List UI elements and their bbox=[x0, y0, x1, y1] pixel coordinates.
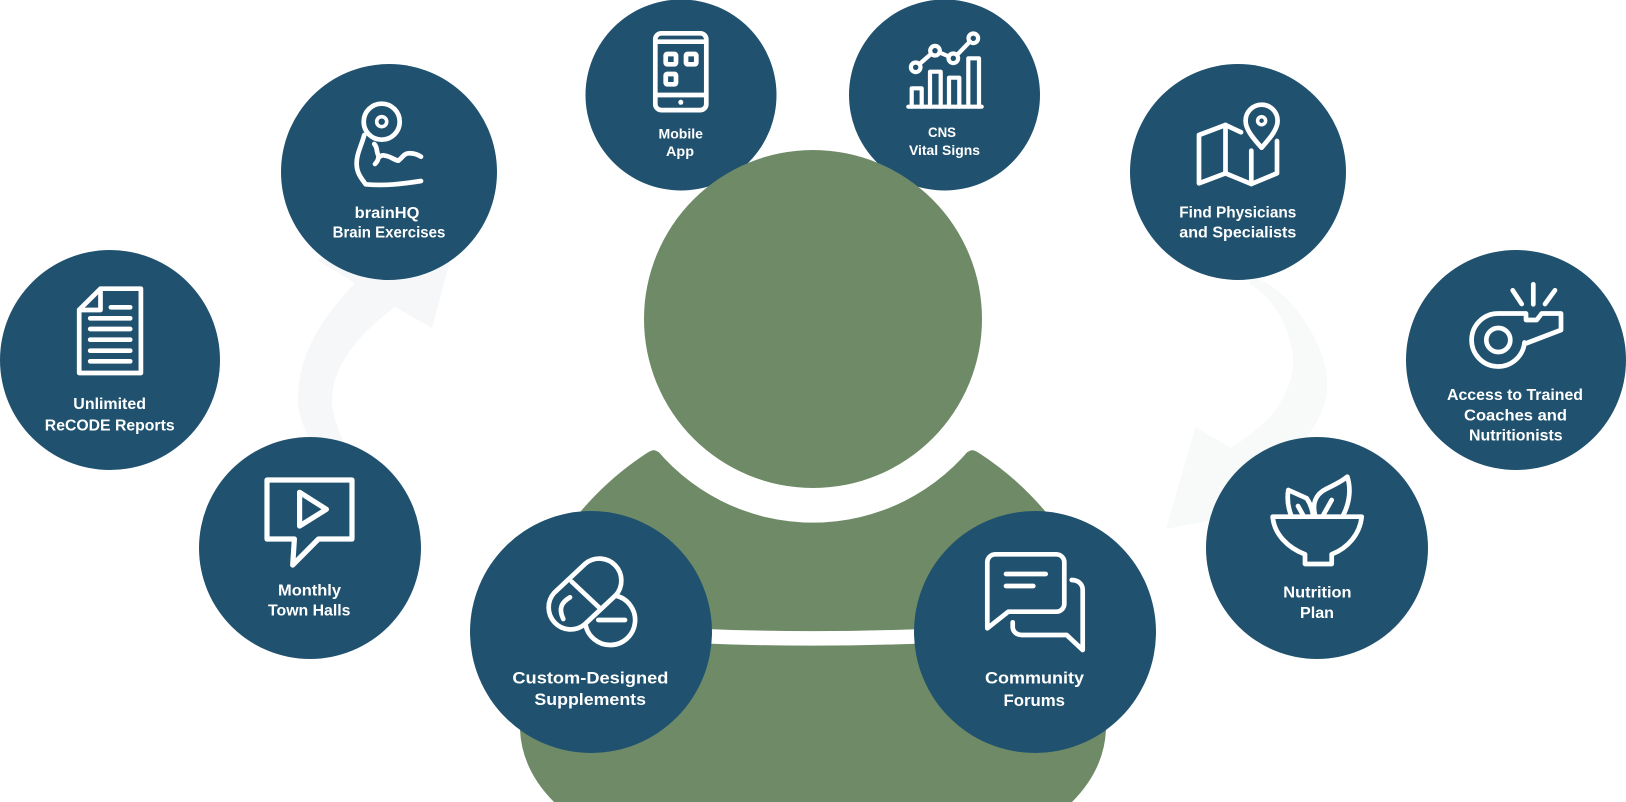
panel: Mobile App bbox=[586, 0, 776, 190]
label: Unlimited ReCODE Reports: Unlimited bbox=[73, 396, 146, 413]
arrow: right curved arrow from Physicians to Nutrition Plan bbox=[1166, 276, 1327, 529]
panel: CNS Vital Signs bbox=[849, 0, 1040, 190]
label: brainHQ Brain Exercises bbox=[333, 205, 445, 242]
icon: flexed arm with weight bbox=[357, 104, 421, 185]
label: Access to Trained Coaches and Nutritionists: Nutritionists bbox=[1469, 428, 1563, 445]
label: Community Forums: Community bbox=[985, 669, 1085, 688]
icon: map with pin bbox=[1199, 105, 1278, 184]
label: Community Forums: Forums bbox=[1004, 691, 1065, 710]
label: Nutrition Plan bbox=[1283, 584, 1352, 622]
icon: bar chart with trend line bbox=[908, 34, 982, 107]
icon: whistle bbox=[1472, 284, 1561, 366]
label: Community Forums bbox=[985, 669, 1085, 710]
label: CNS Vital Signs bbox=[909, 124, 980, 158]
panel: Custom-Designed Supplements bbox=[470, 511, 712, 753]
label: Monthly Town Halls: Town Halls bbox=[268, 603, 351, 620]
label: Custom-Designed Supplements bbox=[512, 668, 668, 709]
panel: Community Forums bbox=[914, 511, 1156, 753]
person figure: green body and head bbox=[520, 150, 1106, 802]
icon: tablet with apps bbox=[655, 33, 706, 110]
icon: bowl with leaves bbox=[1273, 477, 1362, 564]
label: Find Physicians and Specialists bbox=[1179, 204, 1296, 241]
label: Mobile App: App bbox=[666, 143, 694, 159]
panel: Unlimited ReCODE Reports bbox=[0, 250, 220, 470]
label: Find Physicians and Specialists: Find Physicians bbox=[1179, 204, 1296, 221]
label: Unlimited ReCODE Reports bbox=[45, 396, 175, 435]
label: CNS Vital Signs: Vital Signs bbox=[909, 142, 980, 158]
label: Access to Trained Coaches and Nutritionists: Coaches and bbox=[1464, 408, 1567, 425]
panel: Nutrition Plan bbox=[1206, 437, 1428, 659]
icon: chat bubbles bbox=[987, 554, 1083, 650]
label: Mobile App: Mobile bbox=[658, 125, 703, 141]
label: brainHQ Brain Exercises: Brain Exercises bbox=[333, 225, 445, 242]
label: Access to Trained Coaches and Nutritionists bbox=[1447, 387, 1583, 445]
label: Find Physicians and Specialists: and Specialists bbox=[1179, 224, 1296, 241]
label: Nutrition Plan: Nutrition bbox=[1283, 584, 1352, 601]
icon: capsule and tablet pills bbox=[549, 559, 635, 645]
person head bbox=[644, 150, 982, 488]
label: Unlimited ReCODE Reports: ReCODE Reports bbox=[45, 418, 175, 435]
label: Nutrition Plan: Plan bbox=[1300, 605, 1334, 622]
label: brainHQ Brain Exercises: brainHQ bbox=[355, 205, 419, 222]
label: CNS Vital Signs: CNS bbox=[928, 124, 956, 140]
person body bbox=[520, 450, 1106, 802]
label: Custom-Designed Supplements: Custom-Designed bbox=[512, 668, 668, 687]
icon: document bbox=[79, 289, 141, 373]
label: Monthly Town Halls: Monthly bbox=[278, 583, 341, 600]
panel: Access to Trained Coaches and Nutritionists bbox=[1406, 250, 1626, 470]
panel: brainHQ Brain Exercises bbox=[281, 64, 497, 280]
label: Access to Trained Coaches and Nutritionists: Access to Trained bbox=[1447, 387, 1583, 404]
label: Custom-Designed Supplements: Supplements bbox=[534, 690, 646, 709]
panel: Find Physicians and Specialists bbox=[1130, 64, 1346, 280]
panel: Monthly Town Halls bbox=[199, 437, 421, 659]
icon: video speech bubble bbox=[267, 480, 352, 565]
arrow: left curved arrow from Town Halls to brainHQ bbox=[298, 205, 465, 445]
label: Monthly Town Halls bbox=[268, 583, 351, 620]
label: Mobile App bbox=[658, 125, 703, 159]
